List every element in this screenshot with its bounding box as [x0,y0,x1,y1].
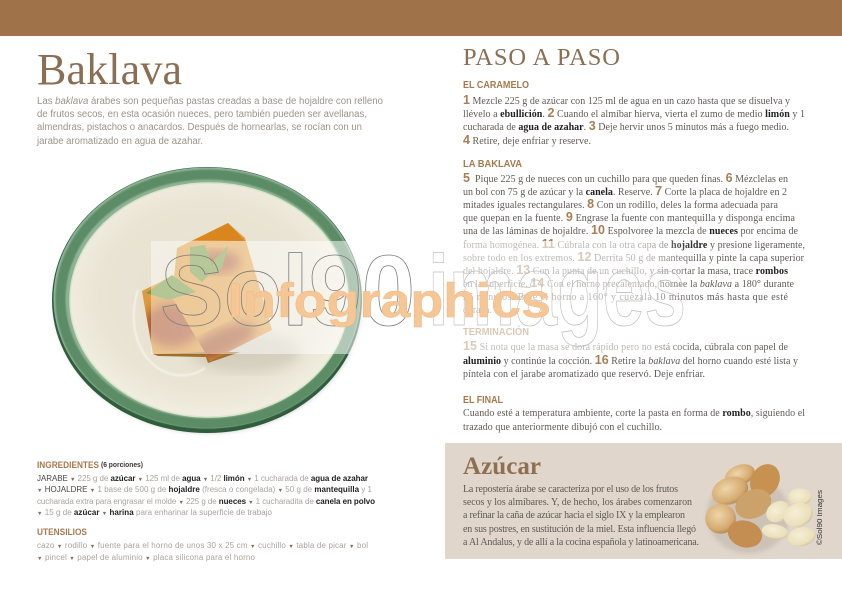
utensil list: cazo ▼ rodillo ▼ fuente para el horno de unos 30 x 25 cm ▼ cuchillo ▼ tabla de picar ▼ bol [37,541,368,550]
steps 1-4: 1 Mezcle 225 g de azúcar con 125 ml de agua en un cazo hasta que se disuelva y [463,93,790,107]
steps 1-4: cucharada de agua de azahar. 3 Deje hervir unos 5 minutos más a fuego medio. [463,119,789,133]
intro paragraph: jarabe aromatizado en agua de azahar. [36,136,203,147]
portions note: (6 porciones) [101,462,143,469]
steps 5-14: dorada. [463,305,492,316]
watermark: images [428,235,686,347]
step section: la baklava [463,159,805,316]
utensil list [37,541,368,562]
steps 5-14: una de las láminas de hojaldre. 10 Espolvoree la mezcla de nueces por encima de [463,223,799,237]
steps 5-14: del hojaldre. 13 Con la punta de un cuchillo, y sin cortar la masa, trace rombos [463,263,788,277]
heading: INGREDIENTES [37,460,99,470]
header band [0,0,842,36]
heading: UTENSILIOS [37,527,87,537]
steps 5-14: sobre todo en los extremos. 12 Derrita 50 g de mantequilla y pinte la capa superior [463,250,805,264]
steps 1-4 [463,93,805,147]
panel: azúcar [445,443,842,559]
step section: terminación [463,325,798,380]
step section: el caramelo [463,80,805,147]
baklava: lower piece [142,278,206,357]
photo: almonds [705,459,817,553]
steps 15-16 [463,339,798,380]
steps 5-14: forma homogénea. 11 Cúbrala con la otra capa de hojaldre y presione ligeramente, [463,237,805,251]
heading: LA BAKLAVA [463,159,522,170]
steps 15-16: aluminio y continúe la cocción. 16 Retire la baklava del horno cuando esté lista y [463,353,798,367]
ingredient list: ▼ 15 g de azúcar ▼ harina para enharinar la superficie de trabajo [37,508,273,517]
intro paragraph: de frutos secos, en esta ocasión nueces, pero también pueden ser avellanas, [37,109,367,120]
steps 5-14: 5 Pique 225 g de nueces con un cuchillo para que queden finas. 6 Mézclelas en [463,171,788,185]
ingredient list: JARABE ▼ 225 g de azúcar ▼ 125 ml de agua ▼ 1/2 limón ▼ 1 cucharada de agua de azahar [37,474,368,483]
panel text: en sus postres, en sustitución de la miel. Esta influencia llegó [463,524,696,535]
heading: paso a paso: PASO A PASO [463,44,620,71]
steps 5-14: que quepan en la fuente. 9 Engrase la fuente con mantequilla y disponga encima [463,210,796,224]
panel text: La repostería árabe se caracteriza por el uso de los frutos [463,484,678,495]
panel text: a Al Andalus, y de allí a la cocina española y latinoamericana. [463,537,699,548]
step section: el final [463,395,805,433]
steps 15-16: píntela con el jarabe aromatizado que reservó. Deje enfriar. [463,369,705,380]
panel text [463,484,699,548]
ingredient list [37,474,375,517]
pistachios [146,245,228,300]
ingredient list: cucharada extra para engrasar el molde ▼ 225 g de nueces ▼ 1 cucharadita de canela en polvo [37,497,375,506]
ingredients [37,460,375,517]
intro paragraph [36,96,383,147]
steps 1-4: llévelo a ebullición. 2 Cuando el almíbar hierva, vierta el zumo de medio limón y 1 [463,106,805,120]
steps 15-16: 15 Si nota que la masa se dora rápido pero no está cocida, cúbrala con papel de [463,339,789,353]
steps 5-14: mitades iguales rectangulares. 8 Con un rodillo, deles la forma adecuada para [463,197,779,211]
baklava: upper piece [172,223,272,369]
steps 5-14: 25 minutos. Baje el horno a 160° y cuézala 10 minutos más hasta que esté [463,292,789,303]
final text: trazado que anteriormente dibujó con el cuchillo. [463,422,662,433]
intro paragraph: Las baklava árabes son pequeñas pastas creadas a base de hojaldre con relleno [37,96,383,107]
heading: EL CARAMELO [463,80,529,91]
final text: Cuando esté a temperatura ambiente, corte la pasta en forma de rombo, siguiendo el [463,408,805,419]
watermark: Sol90 [160,235,415,347]
steps 5-14 [463,171,805,316]
heading: TERMINACIÓN [463,325,529,338]
final text [463,408,805,433]
watermark [151,235,700,354]
utensil list: ▼ pincel ▼ papel de aluminio ▼ placa silicona para el horno [37,553,256,562]
photo: baklava on plate [52,167,362,433]
panel text: secos y los almíbares. Y, de hecho, los árabes comenzaron [463,497,692,508]
panel text: a refinar la caña de azúcar hacia el siglo IX y la emplearon [463,510,685,521]
utensils [37,527,368,562]
title: Baklava [37,45,182,94]
heading: EL FINAL [463,395,503,406]
ingredient list: ▼ HOJALDRE ▼ 1 base de 500 g de hojaldre (fresca o congelada) ▼ 50 g de mantequilla y 1 [37,485,373,494]
steps 5-14: un bol con 75 g de azúcar y la canela. Reserve. 7 Corte la placa de hojaldre en 2 [463,184,787,198]
watermark: Infographics [228,275,551,328]
intro paragraph: almendras, pistachos o anacardos. Después de hornearlas, se rocían con un [37,122,362,133]
steps 1-4: 4 Retire, deje enfriar y reserve. [463,133,591,147]
photo credit: ©Sol90 Images [815,490,824,545]
steps 5-14: en la superficie. 14 Con el horno precalentado, hornee la baklava a 180° durante [463,276,795,290]
panel heading: Azúcar [463,453,541,480]
